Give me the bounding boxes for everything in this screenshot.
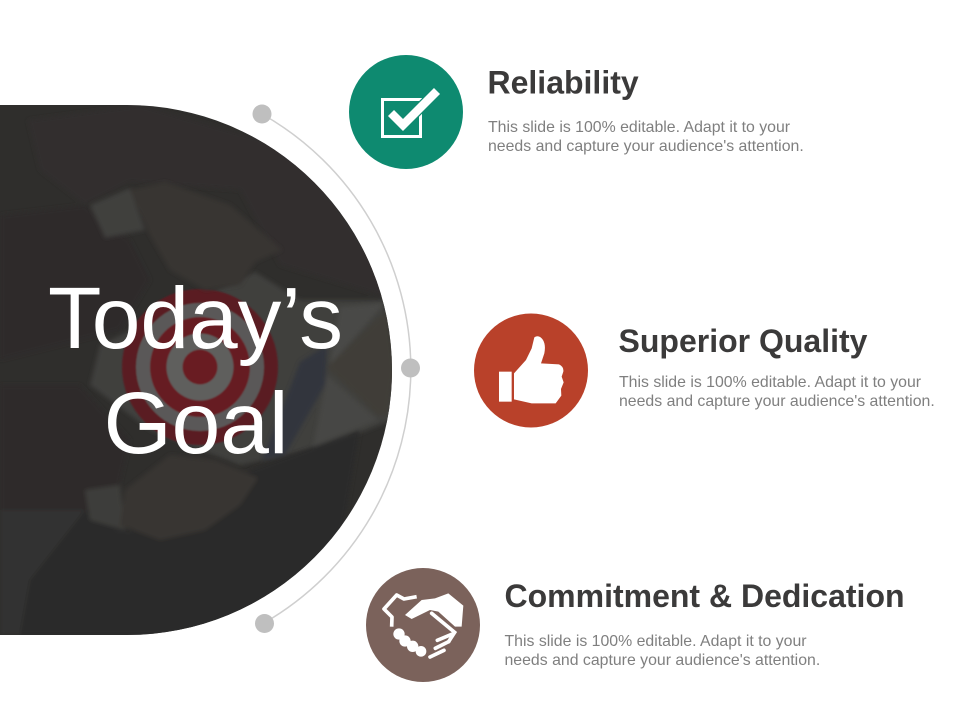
title: Goal	[104, 374, 288, 472]
icon: thumbs up	[474, 314, 588, 428]
heading: commitment and dedication: Commitment & Dedication	[504, 578, 905, 614]
target	[122, 289, 278, 445]
panel: commitment and dedication	[366, 568, 905, 682]
title: Today’s	[48, 269, 343, 367]
text: superior quality description: This slide is 100% editable. Adapt it to your	[619, 374, 922, 391]
icon: checkbox	[349, 55, 463, 169]
photo: businessman opening suit to reveal target	[0, 105, 400, 635]
title	[48, 269, 343, 472]
text: reliability description: needs and capture your audience's attention.	[488, 138, 804, 155]
text: commitment description: This slide is 100% editable. Adapt it to your	[504, 633, 807, 650]
text: superior quality description: needs and capture your audience's attention.	[619, 393, 935, 410]
panel: reliability	[349, 55, 804, 169]
icon: handshake	[366, 568, 480, 682]
panel: superior quality	[474, 314, 935, 428]
arc connector with three dots	[252, 104, 420, 633]
panel: dark photo disc with title	[0, 105, 400, 635]
text: reliability description: This slide is 100% editable. Adapt it to your	[488, 119, 791, 136]
heading: superior quality: Superior Quality	[618, 323, 868, 359]
text: commitment description: needs and capture your audience's attention.	[504, 652, 820, 669]
heading: reliability: Reliability	[488, 64, 639, 100]
